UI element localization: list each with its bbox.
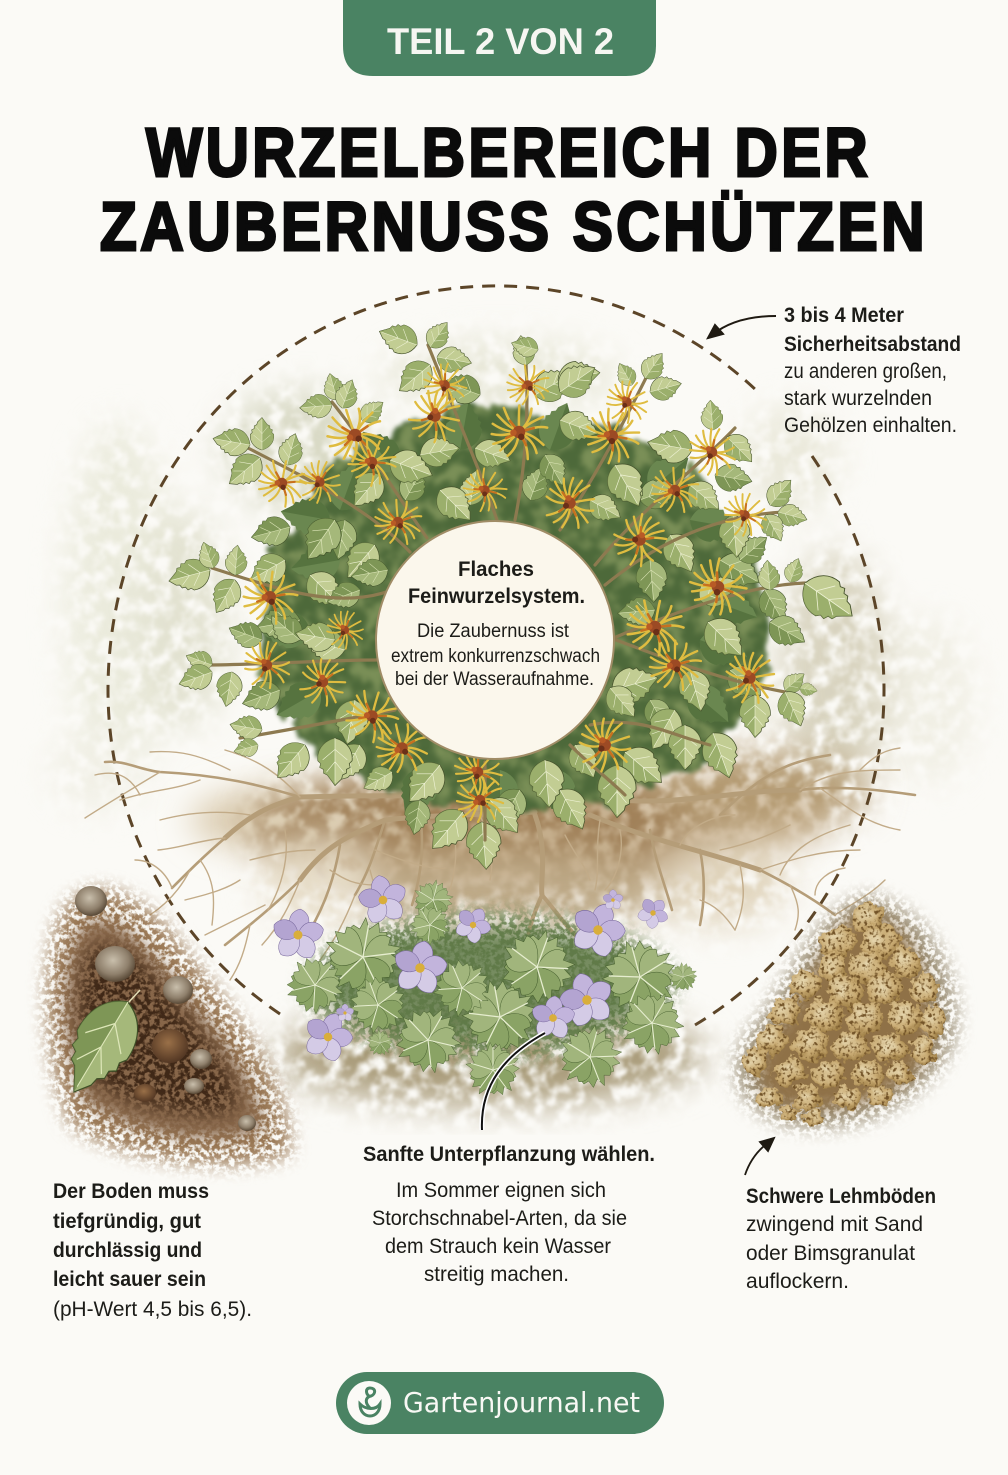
- pumice granules: [742, 903, 946, 1126]
- arrow: underplanting: [482, 1033, 545, 1130]
- text: soil requirements: durchlässig und: [53, 1239, 202, 1262]
- sand and pumice pile right: [735, 895, 957, 1128]
- center body: [391, 621, 600, 690]
- text: heavy soil: [746, 1185, 936, 1293]
- text: heavy soil: zwingend mit Sand: [746, 1213, 923, 1236]
- fallen leaf: [49, 987, 153, 1107]
- branches: [205, 345, 805, 840]
- foliage mass: [262, 409, 768, 810]
- icon: sprout in bowl: [347, 1381, 391, 1425]
- text: underplanting: Im Sommer eignen sich: [396, 1179, 606, 1202]
- text: soil requirements: leicht sauer sein: [53, 1268, 206, 1291]
- center body: bei der Wasseraufnahme.: [395, 669, 594, 690]
- text: underplanting: dem Strauch kein Wasser: [385, 1235, 611, 1258]
- center body: extrem konkurrenzschwach: [391, 646, 600, 667]
- text: distance note: zu anderen großen,: [784, 360, 947, 383]
- text: underplanting: Storchschnabel-Arten, da sie: [372, 1207, 627, 1230]
- text: heavy soil: auflockern.: [746, 1270, 849, 1293]
- watercolor background washes: [50, 340, 975, 810]
- soil body: [46, 889, 290, 1165]
- inner light leaves: [225, 357, 796, 871]
- center circle: [376, 521, 614, 759]
- text: distance note: stark wurzelnden: [784, 387, 932, 410]
- text: heavy soil: Schwere Lehmböden: [746, 1185, 936, 1208]
- center heading: [408, 558, 585, 608]
- text: underplanting: [363, 1143, 655, 1286]
- shrub: witch hazel: [165, 316, 864, 871]
- badge: part label: TEIL 2 VON 2: [387, 21, 614, 62]
- inner dark leaves: [260, 397, 763, 823]
- arrow: distance note: [708, 316, 776, 338]
- root zone soil wash: [190, 752, 870, 930]
- text: heavy soil: oder Bimsgranulat: [746, 1242, 915, 1265]
- witch hazel blossoms: [235, 357, 778, 822]
- footer logo pill: Gartenjournal.net: [403, 1386, 640, 1419]
- title: [100, 114, 928, 265]
- text: distance note: Sicherheitsabstand: [784, 333, 961, 356]
- badge: part label: [343, 0, 656, 76]
- roots: [85, 748, 915, 980]
- text: underplanting: streitig machen.: [424, 1263, 569, 1286]
- sand halo: [735, 895, 957, 1128]
- center circle with text: [376, 521, 614, 759]
- footer logo pill: [336, 1372, 664, 1434]
- center heading: Flaches: [458, 558, 534, 581]
- text: soil requirements: tiefgründig, gut: [53, 1210, 201, 1233]
- soil stones: [75, 886, 256, 1131]
- text: distance note: 3 bis 4 Meter: [784, 304, 904, 327]
- text: soil requirements: [53, 1180, 252, 1321]
- outer tip leaves: [165, 316, 864, 760]
- center heading: Feinwurzelsystem.: [408, 585, 585, 608]
- geranium blossoms: [268, 871, 676, 1070]
- title: WURZELBEREICH DER: [146, 114, 871, 191]
- geranium leaves: [270, 875, 699, 1101]
- text: underplanting: Sanfte Unterpflanzung wählen.: [363, 1143, 655, 1166]
- soil pile left: [46, 886, 290, 1165]
- sand base: [758, 910, 932, 1109]
- ground cover: geranium plants: [268, 871, 705, 1105]
- arrow: heavy soil: [745, 1138, 774, 1175]
- text: soil requirements: Der Boden muss: [53, 1180, 209, 1203]
- text: distance note: [784, 304, 961, 437]
- dashed protection circle: [108, 286, 884, 1025]
- text: distance note: Gehölzen einhalten.: [784, 414, 957, 437]
- ground cover wash: [275, 913, 705, 1105]
- center body: Die Zaubernuss ist: [417, 621, 570, 642]
- text: soil requirements: (pH-Wert 4,5 bis 6,5).: [53, 1298, 252, 1321]
